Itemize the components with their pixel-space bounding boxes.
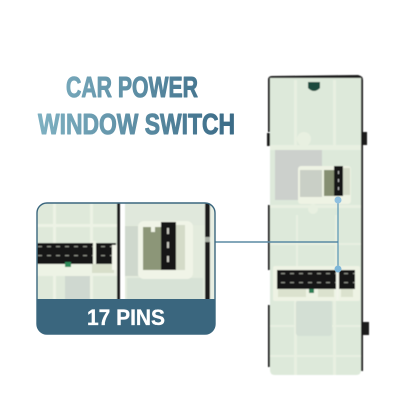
label bar (37, 299, 215, 334)
side edges and tabs (267, 75, 369, 371)
right detail photo (125, 203, 215, 300)
left detail photo (37, 203, 120, 300)
title: CAR POWER (66, 72, 198, 104)
product: window switch (267, 75, 369, 375)
top notch (308, 82, 320, 91)
upper connector housing (298, 166, 351, 204)
switch body (270, 78, 361, 375)
lower body shade (296, 300, 332, 336)
panel border (37, 203, 215, 334)
lower connector housing (273, 266, 360, 301)
label text: 17 PINS (87, 305, 165, 330)
panel: 17 pins (37, 203, 215, 334)
pointer lines (215, 196, 342, 272)
grey square (275, 150, 322, 200)
title: WINDOW SWITCH (38, 109, 235, 141)
body ribs (270, 80, 361, 375)
title (38, 72, 235, 141)
